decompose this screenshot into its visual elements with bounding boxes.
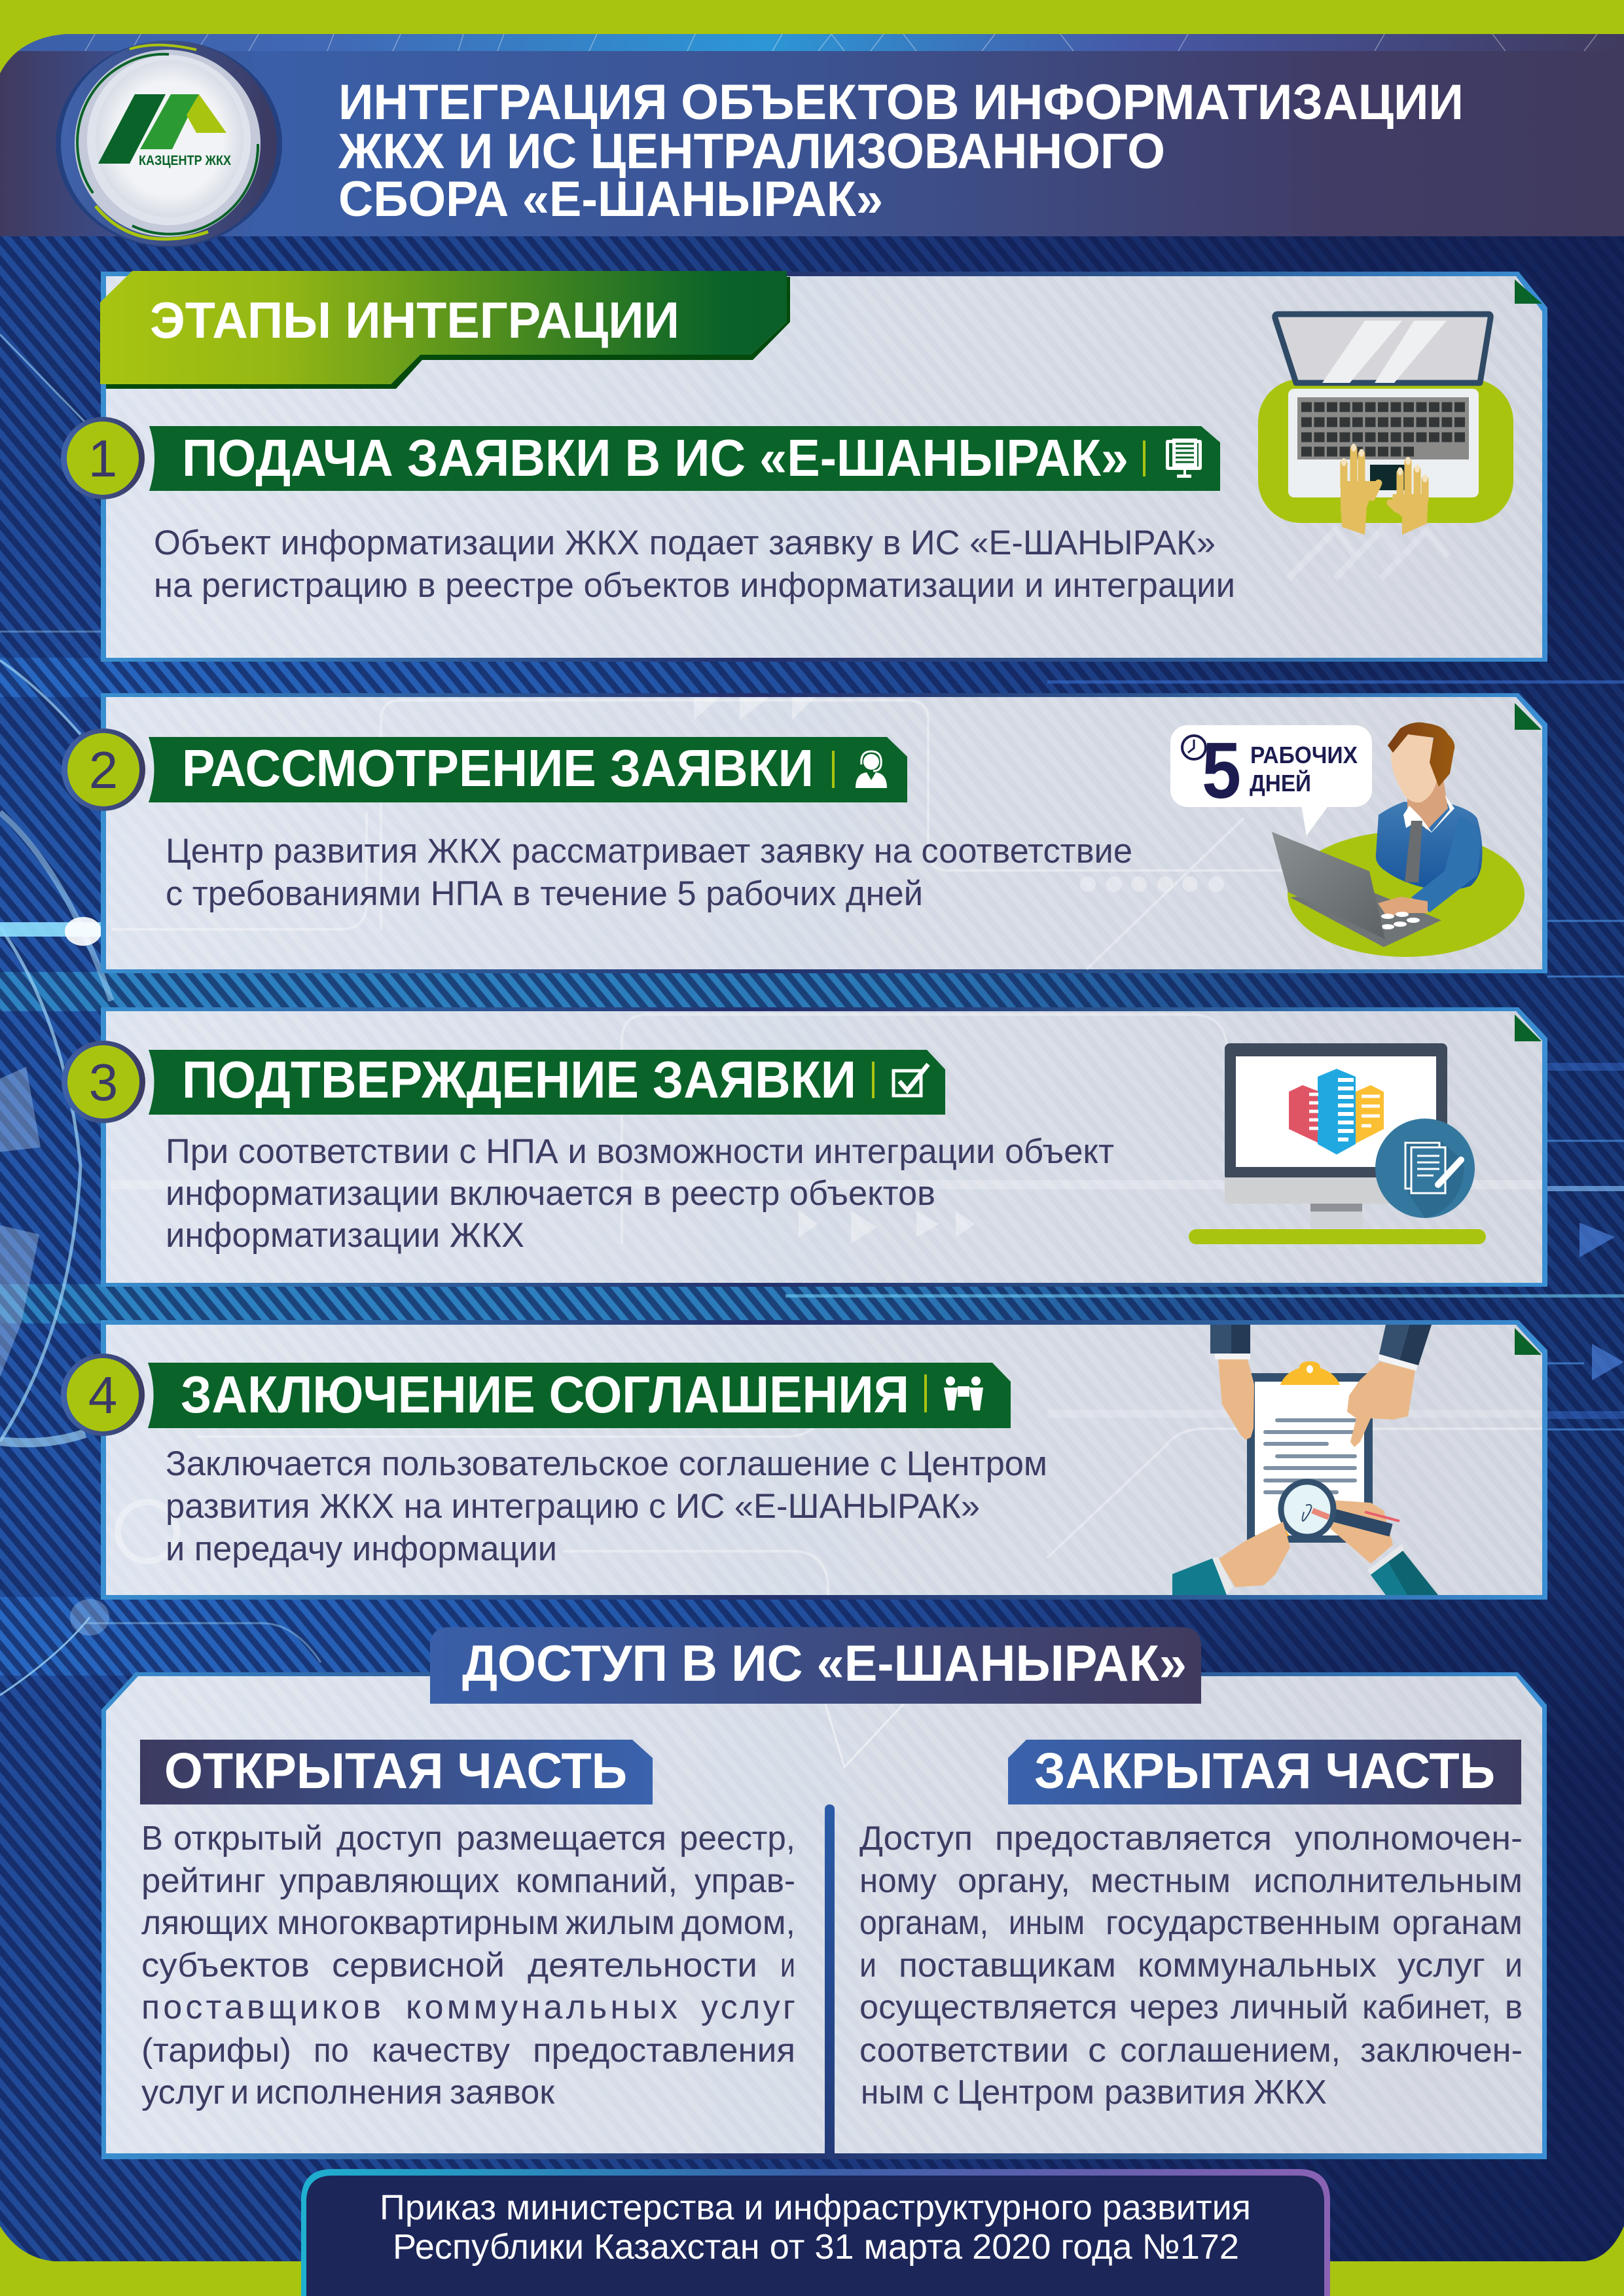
title: ЖКХ И ИС ЦЕНТРАЛИЗОВАННОГО [338, 124, 1165, 179]
text: closed part: кабинет, [1362, 1988, 1491, 2026]
step 4 text: развития ЖКХ на интеграцию с ИС «Е-ШАНЫРАК» [166, 1487, 980, 1526]
heading tab: closed part: ЗАКРЫТАЯ ЧАСТЬ [1034, 1743, 1495, 1799]
step 2 banner: РАССМОТРЕНИЕ ЗАЯВКИ [182, 739, 814, 797]
footer: order reference: Республики Казахстан от 31 марта 2020 года №172 [393, 2227, 1239, 2267]
text: closed part: в [1505, 1988, 1523, 2026]
step 2 text: Центр развития ЖКХ рассматривает заявку на соответствие [166, 832, 1132, 870]
text: closed part: государственным [1106, 1904, 1380, 1942]
text: closed part: ЖКХ [1254, 2073, 1327, 2111]
bottom-right green corner [1322, 2226, 1624, 2296]
text: open part: субъектов [141, 1946, 310, 1984]
buildings [1289, 1069, 1384, 1155]
text: open part: услуг [141, 2073, 225, 2111]
step 1 number [61, 417, 145, 499]
text: closed part: предоставляется [995, 1820, 1272, 1857]
text: open part: открытый [173, 1820, 323, 1857]
heading badge: stages: ЭТАПЫ ИНТЕГРАЦИИ [150, 291, 679, 349]
step 1 text: на регистрацию в реестре объектов информатизации и интеграции [154, 566, 1235, 605]
text: closed part: органам [1392, 1904, 1523, 1942]
text: open part: компаний, [516, 1862, 677, 1900]
text: closed part: Доступ [859, 1820, 973, 1857]
callout: 5 working days [1170, 725, 1372, 836]
text: closed part: органам, [859, 1904, 988, 1942]
text: open part [141, 1820, 795, 2111]
logo mark [98, 94, 226, 164]
text: open part: услуг [701, 1988, 795, 2026]
text: closed part: развития [1104, 2073, 1246, 2111]
step 3 text: информатизации включается в реестр объектов [166, 1174, 935, 1213]
text: open part: управ- [695, 1862, 795, 1900]
text: open part: сервисной [332, 1946, 505, 1984]
icon: checkbox [893, 1064, 928, 1096]
text: open part: В [141, 1820, 163, 1857]
text: closed part: органу, [958, 1862, 1070, 1900]
title: СБОРА «Е-ШАНЫРАК» [338, 171, 883, 227]
text: open part: деятельности [528, 1946, 757, 1984]
icon: document on monitor [1166, 439, 1202, 478]
heading tab: access: ДОСТУП В ИС «Е-ШАНЫРАК» [462, 1634, 1187, 1692]
step 3 number [62, 1041, 145, 1123]
step 4 number [61, 1354, 145, 1436]
text: open part: (тарифы) [141, 2032, 291, 2070]
step 2 number [62, 728, 145, 811]
text: open part: по [314, 2032, 349, 2070]
text: open part: исполнения [255, 2073, 442, 2111]
text: closed part: Центром [957, 2073, 1094, 2111]
title: ИНТЕГРАЦИЯ ОБЪЕКТОВ ИНФОРМАТИЗАЦИИ [338, 75, 1464, 130]
step 1 banner: ПОДАЧА ЗАЯВКИ В ИС «Е-ШАНЫРАК» [182, 429, 1128, 487]
text: open part: размещается [456, 1820, 666, 1857]
icon: handshake people [944, 1376, 983, 1410]
text: open part: домом, [681, 1904, 795, 1942]
callout: 5 working days: 5 [1202, 726, 1241, 815]
panel: access [101, 1672, 1547, 2159]
text: closed part: уполномочен- [1295, 1820, 1523, 1857]
step 4 text [166, 1444, 1047, 1568]
text: open part: рейтинг [141, 1862, 266, 1900]
heading badge: stages [100, 271, 790, 389]
step 2 number: 2 [89, 741, 118, 799]
footer: order reference [301, 2169, 1330, 2296]
icon: operator with headset [856, 751, 887, 788]
step 1 text: Объект информатизации ЖКХ подает заявку в ИС «Е-ШАНЫРАК» [154, 524, 1216, 562]
text: open part: доступ [336, 1820, 442, 1857]
step 3 text [166, 1132, 1114, 1255]
text: open part: качеству [372, 2032, 510, 2070]
text: closed part [859, 1820, 1523, 2111]
step 1 number: 1 [88, 429, 117, 488]
header band [0, 34, 1624, 236]
text: closed part: соответствии [859, 2032, 1069, 2070]
step 4 text: Заключается пользовательское соглашение с Центром [166, 1444, 1047, 1483]
callout: 5 working days: ДНЕЙ [1250, 769, 1311, 797]
text: open part: ляющих [141, 1904, 268, 1942]
step 4 number: 4 [88, 1366, 117, 1424]
step 4 text: и передачу информации [166, 1530, 557, 1568]
callout: 5 working days: РАБОЧИХ [1250, 742, 1358, 768]
panel: step 3 [101, 1007, 1547, 1287]
logo medallion [56, 41, 282, 247]
step 3 text: При соответствии с НПА и возможности интеграции объект [166, 1132, 1114, 1171]
text: open part: управляющих [280, 1862, 499, 1900]
heading tab: open part: ОТКРЫТАЯ ЧАСТЬ [164, 1743, 627, 1799]
illustration: hands with clipboard [1172, 1325, 1438, 1595]
text: closed part: услуг [1398, 1946, 1485, 1984]
step 3 banner: ПОДТВЕРЖДЕНИЕ ЗАЯВКИ [182, 1050, 856, 1109]
text: closed part: через [1129, 1988, 1219, 2026]
panel: step 2 [101, 693, 1547, 973]
text: closed part: заключен- [1360, 2032, 1523, 2070]
illustration: laptop and hands [1258, 314, 1513, 535]
text: open part: жилым [566, 1904, 675, 1942]
bottom-left green corner [0, 2226, 308, 2296]
step 3 number: 3 [89, 1053, 118, 1111]
text: closed part: и [859, 1946, 876, 1984]
illustration: reviewer with laptop [1170, 723, 1525, 957]
text: closed part: и [1505, 1946, 1523, 1984]
panel: step 4 [101, 1320, 1547, 1600]
text: open part: и [230, 2073, 249, 2111]
text: open part: и [780, 1946, 795, 1984]
text: closed part: поставщикам [899, 1946, 1116, 1984]
title [338, 75, 1464, 227]
text: open part: многоквартирным [277, 1904, 559, 1942]
footer: order reference: Приказ министерства и инфраструктурного развития [380, 2188, 1251, 2227]
top green strip [0, 0, 1624, 73]
text: closed part: ному [859, 1862, 937, 1900]
logo text: КАЗЦЕНТР ЖКХ [139, 153, 231, 168]
text: closed part: ным [861, 2073, 924, 2111]
icon: signed document [1375, 1119, 1475, 1218]
text: open part: поставщиков [141, 1988, 381, 2026]
step 1 text [154, 524, 1235, 605]
text: closed part: местным [1091, 1862, 1231, 1900]
step 2 text [166, 832, 1132, 913]
text: closed part: осуществляется [859, 1988, 1117, 2026]
text: open part: коммунальных [406, 1988, 677, 2026]
step 3 text: информатизации ЖКХ [166, 1216, 524, 1255]
text: open part: предоставления [533, 2032, 795, 2070]
text: open part: реестр, [679, 1820, 795, 1857]
divider [825, 1804, 835, 2159]
text: closed part: соглашением, [1120, 2032, 1341, 2070]
text: closed part: исполнительным [1254, 1862, 1523, 1900]
text: open part: заявок [450, 2073, 554, 2111]
text: closed part: с [933, 2073, 949, 2111]
text: closed part: иным [1009, 1904, 1085, 1942]
step 4 banner: ЗАКЛЮЧЕНИЕ СОГЛАШЕНИЯ [181, 1365, 909, 1424]
panel: step 1 [101, 272, 1547, 662]
text: closed part: коммунальных [1138, 1946, 1377, 1984]
step 2 text: с требованиями НПА в течение 5 рабочих дней [166, 874, 923, 913]
illustration: monitor with buildings [1189, 1043, 1486, 1244]
text: closed part: личный [1231, 1988, 1348, 2026]
text: closed part: с [1088, 2032, 1106, 2070]
